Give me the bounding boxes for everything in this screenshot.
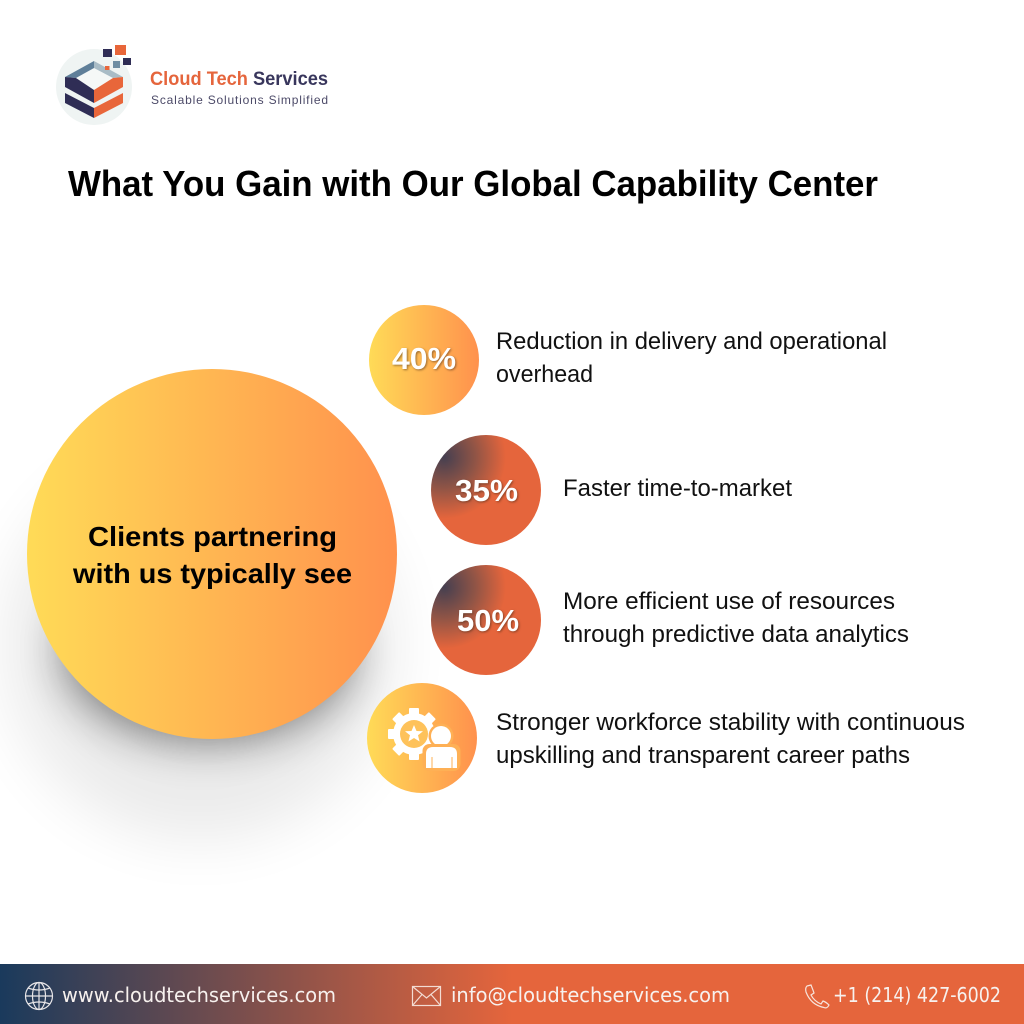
title: What You Gain with Our Global Capability Center	[68, 163, 878, 204]
item: 50%	[431, 565, 909, 675]
footer bar	[0, 964, 1024, 1024]
badge 50%	[431, 565, 541, 675]
item: workforce	[367, 683, 965, 793]
text 40%: Reduction in delivery and operational	[496, 328, 887, 355]
big circle text	[72, 521, 352, 589]
badge 35%	[431, 435, 541, 545]
badge 35%: 35%	[455, 473, 518, 508]
logo	[56, 45, 328, 125]
item: 35%	[431, 435, 792, 545]
email: info@cloudtechservices.com	[451, 983, 730, 1007]
phone number: +1 (214) 427-6002	[833, 983, 1001, 1007]
logo name: Cloud Tech Services	[150, 69, 328, 90]
item: 40%	[369, 305, 887, 415]
text workforce: upskilling and transparent career paths	[496, 742, 910, 769]
text 40%	[496, 328, 887, 388]
text workforce: Stronger workforce stability with continuous	[496, 709, 965, 736]
big circle: clients partnering	[27, 369, 397, 739]
website: www.cloudtechservices.com	[62, 983, 336, 1007]
logo mark	[56, 45, 132, 125]
text 35%: Faster time-to-market	[563, 475, 792, 502]
text 50%	[563, 588, 909, 648]
text workforce	[496, 709, 965, 769]
icon: globe	[26, 982, 52, 1010]
big circle text: with us typically see	[72, 558, 352, 589]
icon: gear and person	[367, 683, 477, 793]
text 40%: overhead	[496, 361, 593, 388]
badge 40%	[369, 305, 479, 415]
icon: envelope	[412, 986, 440, 1006]
icon: phone	[806, 985, 829, 1008]
text 50%: through predictive data analytics	[563, 621, 909, 648]
badge 40%: 40%	[392, 341, 456, 376]
badge 50%: 50%	[457, 603, 519, 638]
text 50%: More efficient use of resources	[563, 588, 895, 615]
big circle text: Clients partnering	[88, 521, 337, 552]
logo tagline: Scalable Solutions Simplified	[151, 93, 328, 107]
big circle shadow	[5, 450, 395, 840]
